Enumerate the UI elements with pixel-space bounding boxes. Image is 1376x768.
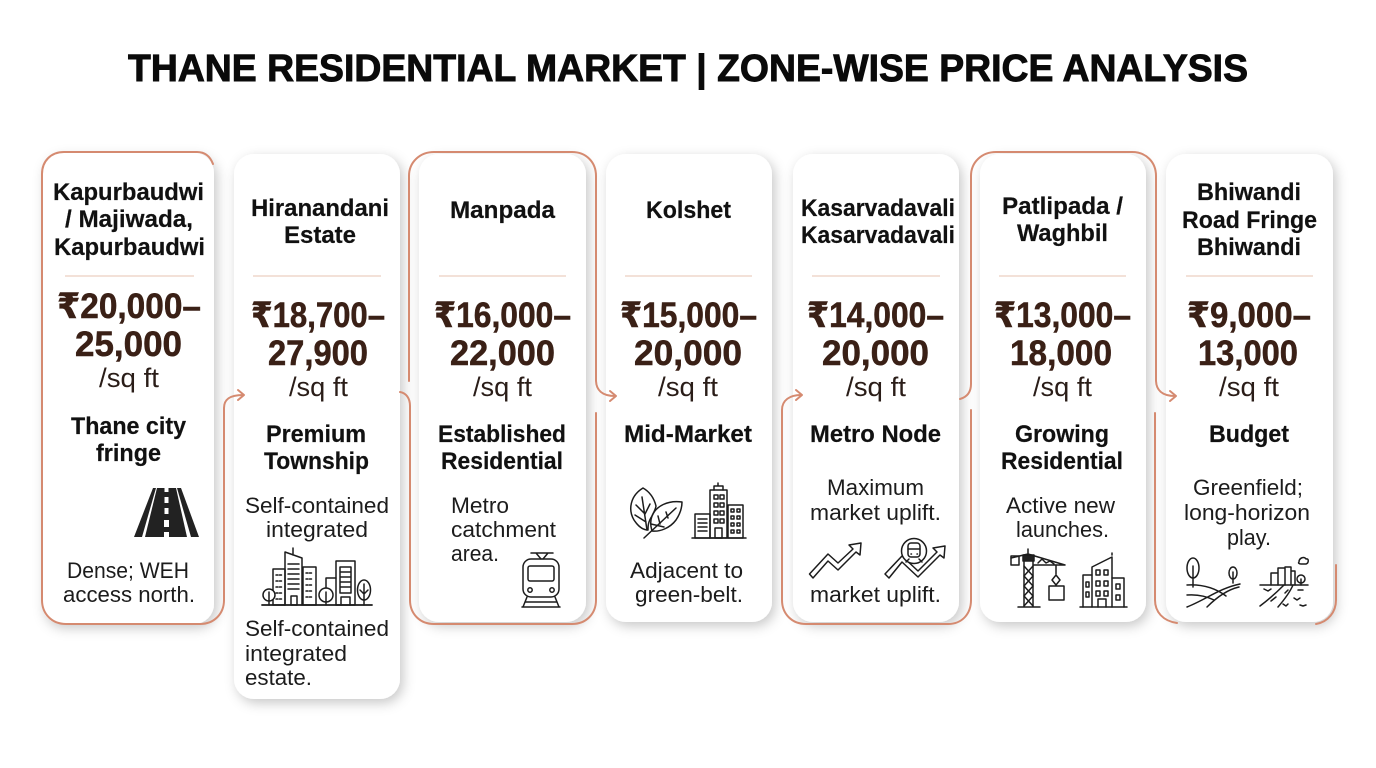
zone name: Kasarvadavali	[801, 195, 955, 222]
zone name: Patlipada /	[1002, 193, 1123, 220]
price	[57, 287, 201, 393]
description	[1006, 493, 1116, 542]
price: ₹9,000–	[1187, 296, 1311, 335]
panel: Bhiwandi Road Fringe	[1166, 154, 1333, 622]
panel: Patlipada / Waghbil	[980, 154, 1146, 622]
zone name: Kolshet	[646, 197, 731, 224]
description: Dense; WEH	[67, 558, 189, 583]
zone name: Bhiwandi	[1197, 179, 1301, 206]
category	[264, 421, 369, 475]
price: 18,000	[1010, 334, 1112, 373]
price: 25,000	[75, 325, 182, 364]
arrow: Hiranandani to Manpada to Kolshet	[400, 152, 616, 624]
price: /sq ft	[99, 363, 160, 393]
category: Established	[438, 421, 566, 448]
zone name	[801, 195, 955, 249]
description: green-belt.	[635, 582, 743, 607]
description: Maximum	[827, 475, 924, 500]
price: 27,900	[268, 334, 368, 373]
category: Metro Node	[810, 421, 941, 448]
icon: greenfield landscape	[1187, 558, 1240, 607]
price: ₹14,000–	[807, 296, 944, 335]
description: Greenfield;	[1193, 475, 1303, 500]
category: Thane city	[71, 413, 187, 440]
zone name: Kapurbaudwi	[54, 234, 205, 261]
description repeat: estate.	[245, 665, 312, 690]
price: ₹18,700–	[251, 296, 385, 335]
description: Adjacent to	[630, 558, 743, 583]
icon: apartment building	[1080, 553, 1127, 607]
price	[251, 296, 385, 402]
category	[438, 421, 566, 475]
category	[1001, 421, 1123, 475]
description: catchment	[451, 517, 557, 542]
category: Residential	[441, 448, 563, 475]
description	[63, 558, 195, 607]
description: market uplift.	[810, 500, 941, 525]
price: /sq ft	[1219, 372, 1280, 402]
category: Mid-Market	[624, 421, 752, 448]
description	[245, 493, 389, 542]
description: launches.	[1016, 517, 1109, 542]
panel: Kapurbaudwi / Majiwada	[42, 153, 214, 624]
price: /sq ft	[289, 372, 349, 402]
zone name	[53, 179, 205, 261]
category	[71, 413, 187, 467]
category: Growing	[1015, 421, 1109, 448]
zone name: Estate	[284, 222, 356, 249]
price: ₹16,000–	[434, 296, 571, 335]
price	[620, 296, 757, 402]
description	[451, 493, 557, 566]
description: Active new	[1006, 493, 1116, 518]
icon: leaves	[631, 488, 682, 538]
zone name: Hiranandani	[251, 195, 389, 222]
description: integrated	[266, 517, 368, 542]
icon: road	[134, 488, 199, 537]
zone name	[1002, 193, 1123, 247]
icon: township buildings	[262, 548, 372, 605]
zone name: Kasarvadavali	[801, 222, 955, 249]
zone name: Manpada	[450, 197, 556, 224]
title: THANE RESIDENTIAL MARKET | ZONE-WISE PRICE ANALYSIS	[128, 48, 1248, 90]
description: area.	[451, 541, 499, 566]
price: /sq ft	[846, 372, 907, 402]
category: Residential	[1001, 448, 1123, 475]
panel: Kolshet	[606, 154, 772, 622]
description: access north.	[63, 582, 195, 607]
zone name	[1182, 179, 1317, 261]
description repeat: integrated	[245, 641, 347, 666]
description	[810, 475, 941, 525]
description: Metro	[451, 493, 509, 518]
price	[1187, 296, 1311, 402]
icon: tower crane	[1011, 549, 1065, 607]
price: 22,000	[450, 334, 555, 373]
description repeat: Self-contained	[245, 616, 389, 641]
category: Township	[264, 448, 369, 475]
panel: Manpada	[419, 154, 586, 622]
arrow: Bhiwandi return line	[1155, 413, 1336, 624]
price: ₹13,000–	[994, 296, 1131, 335]
description repeat: market uplift.	[810, 582, 941, 607]
icon: city building	[692, 483, 746, 538]
zone name: Kapurbaudwi	[53, 179, 204, 206]
icon: city road	[1260, 558, 1308, 607]
category: Budget	[1209, 421, 1289, 448]
category: fringe	[96, 440, 161, 467]
zone name	[251, 195, 389, 249]
icon: metro growth arrow	[885, 538, 945, 578]
icon: rising arrow	[810, 543, 861, 578]
price	[994, 296, 1131, 402]
price: 13,000	[1198, 334, 1298, 373]
icon: metro train	[522, 553, 560, 607]
category: Premium	[266, 421, 366, 448]
panel: Kasarvadavali	[793, 154, 959, 622]
zone name: Road Fringe	[1182, 207, 1317, 234]
arrow: Kapurbaudwi to Hiranandani	[42, 152, 244, 624]
price: /sq ft	[473, 372, 533, 402]
zone name: / Majiwada,	[65, 206, 193, 233]
zone name: Waghbil	[1017, 220, 1108, 247]
price	[807, 296, 944, 402]
price: 20,000	[634, 334, 742, 373]
description	[630, 558, 743, 607]
description: Self-contained	[245, 493, 389, 518]
arrow: Kolshet to Kasarvadavali	[782, 390, 971, 624]
price: ₹15,000–	[620, 296, 757, 335]
zone name: Bhiwandi	[1197, 234, 1301, 261]
description repeat	[245, 616, 389, 690]
price: /sq ft	[658, 372, 719, 402]
price: ₹20,000–	[57, 287, 201, 326]
arrow: Kasarvadavali to Patlipada to Bhiwandi	[960, 152, 1176, 401]
description	[1184, 475, 1310, 550]
description: long-horizon	[1184, 500, 1310, 525]
price	[434, 296, 571, 402]
panel: Hiranandani Estate	[234, 154, 400, 699]
price: /sq ft	[1033, 372, 1093, 402]
description: play.	[1227, 525, 1271, 550]
price: 20,000	[822, 334, 929, 373]
